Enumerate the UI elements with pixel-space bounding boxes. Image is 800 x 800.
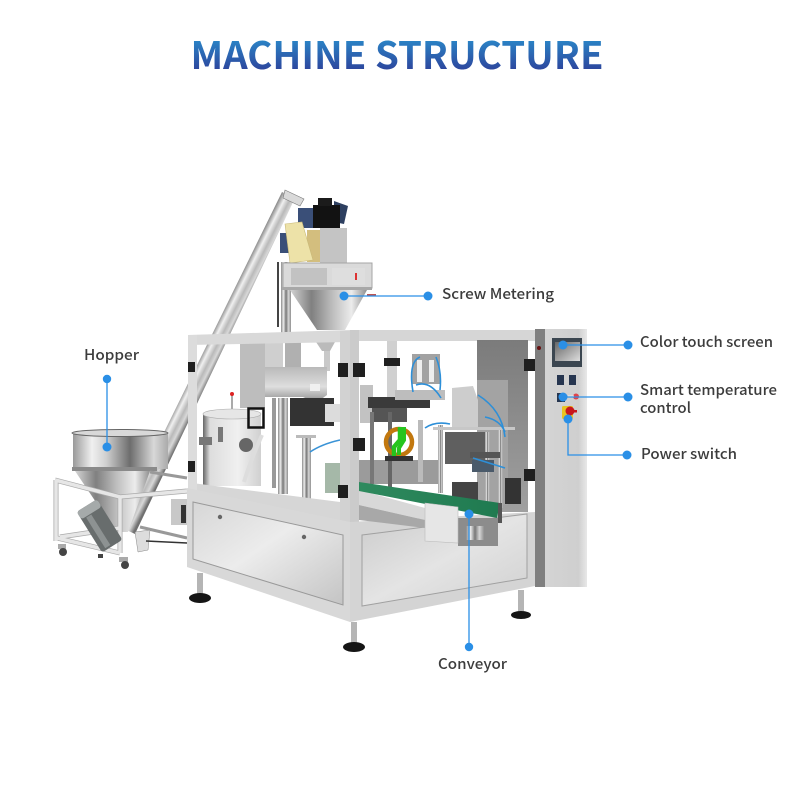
touch screen xyxy=(552,338,582,367)
feet xyxy=(189,573,531,652)
left interior: back plate and tank xyxy=(199,342,301,486)
title: MACHINE STRUCTURE xyxy=(190,25,604,80)
machine base left side xyxy=(187,488,350,622)
hopper motor xyxy=(77,499,122,553)
auger conveyor tube xyxy=(118,190,304,534)
right interior window xyxy=(359,340,528,512)
hinges xyxy=(188,358,535,498)
callout: smart temperature control: Smart temperature xyxy=(640,379,777,400)
casters xyxy=(58,544,129,569)
callout: hopper xyxy=(84,344,139,452)
callout: smart temperature control: control xyxy=(640,397,691,418)
callout: screw metering xyxy=(340,283,555,304)
callout: conveyor xyxy=(438,510,507,674)
machine base right side xyxy=(350,512,535,622)
callout: color touch screen: Color touch screen xyxy=(640,331,773,352)
filling mechanism xyxy=(368,354,521,508)
control cabinet xyxy=(535,329,587,587)
logo on mechanism xyxy=(385,427,413,461)
callout: conveyor: Conveyor xyxy=(438,653,507,674)
left table surface xyxy=(192,483,340,522)
machine frame xyxy=(188,330,535,524)
left central dosing block xyxy=(248,367,340,501)
temperature controllers xyxy=(557,375,579,402)
callout: smart temperature control xyxy=(558,379,777,418)
hopper on wheeled frame xyxy=(55,430,187,569)
support column behind screw doser xyxy=(277,262,291,342)
illustration: packaging machine xyxy=(55,190,587,652)
pneumatic tubes xyxy=(412,357,505,468)
callout: power switch xyxy=(564,414,737,464)
screw metering unit xyxy=(280,198,376,371)
callout: power switch: Power switch xyxy=(641,443,737,464)
conveyor xyxy=(359,482,502,546)
hopper frame xyxy=(55,480,187,553)
callout: color touch screen xyxy=(558,331,773,352)
power switch xyxy=(562,406,577,419)
callout: hopper: Hopper xyxy=(84,344,139,365)
callout: screw metering: Screw Metering xyxy=(442,283,555,304)
